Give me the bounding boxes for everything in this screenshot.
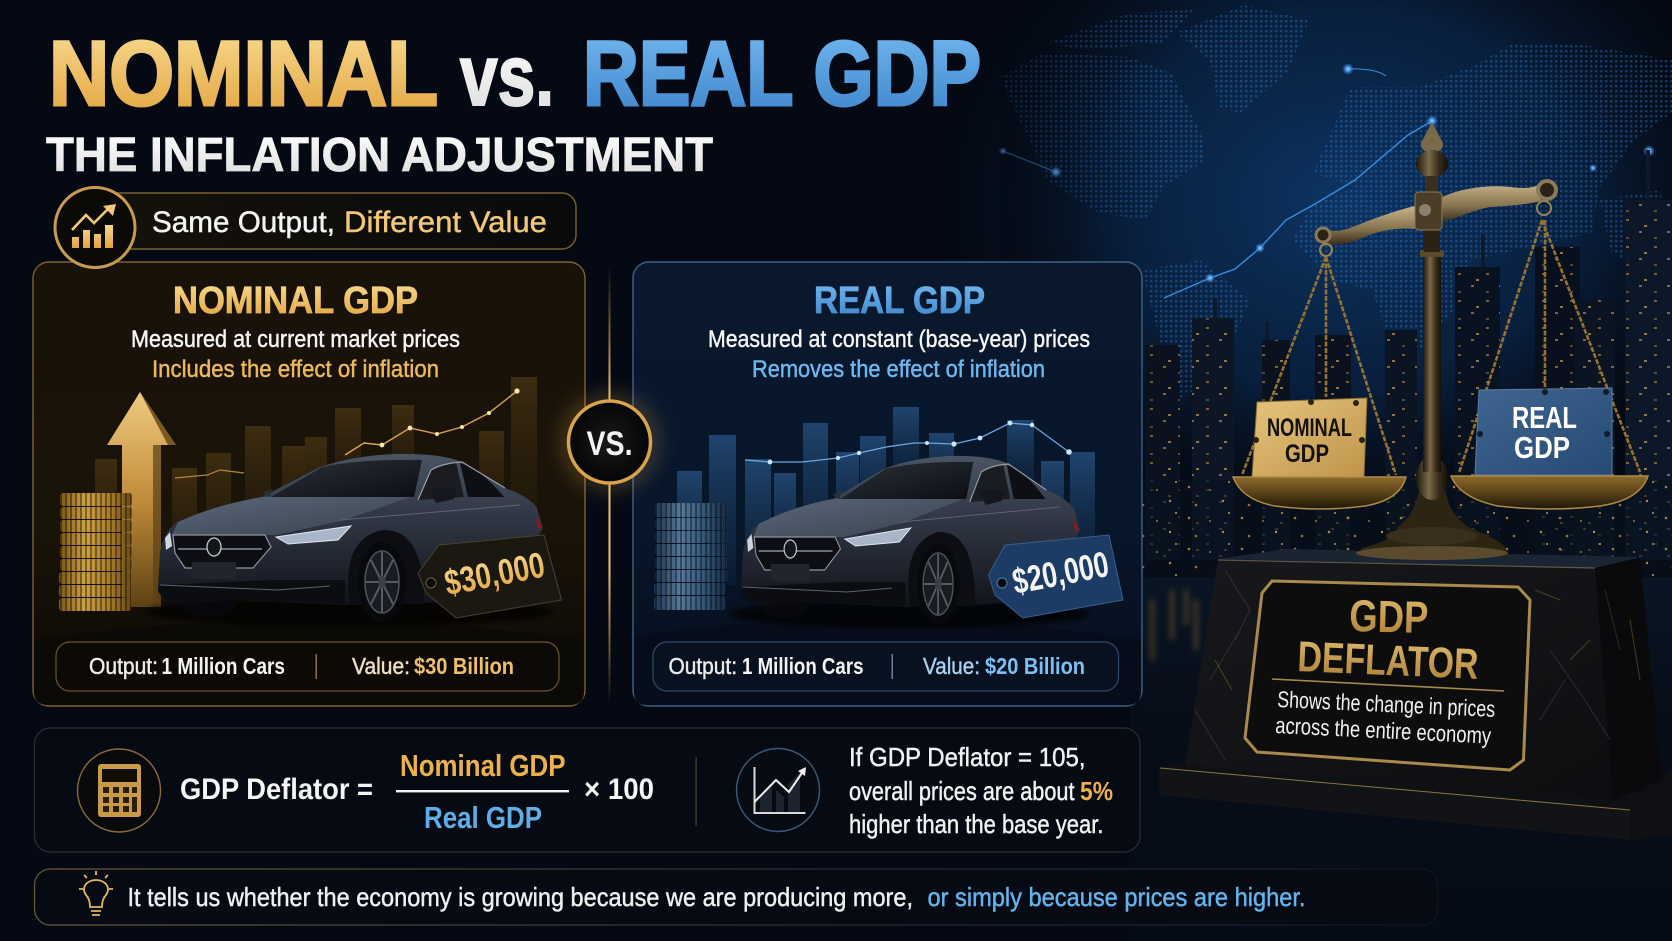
nominal stats pill: Output:: [89, 653, 158, 679]
real gdp plate: GDP: [1514, 430, 1570, 465]
nominal gdp plate: [1252, 398, 1367, 477]
nominal description: Measured at current market prices: [131, 326, 460, 353]
city skyline: [1142, 150, 1672, 580]
subtitle: THE INFLATION ADJUSTMENT: [46, 129, 713, 182]
blue coin stack: [654, 503, 727, 610]
nominal gdp plate: NOMINAL: [1267, 414, 1352, 442]
title: REAL GDP: [583, 23, 981, 125]
deflator explanation: If GDP Deflator = 105,: [849, 742, 1086, 772]
vs badge: [558, 265, 662, 705]
title: NOMINAL: [49, 23, 438, 125]
pedestal: [1159, 549, 1672, 840]
right pan: [1451, 476, 1648, 509]
same output banner: [55, 188, 576, 268]
nominal stats pill: [56, 642, 559, 691]
fraction: Nominal GDP: [400, 748, 566, 783]
takeaway bar: or simply because prices are higher.: [928, 882, 1306, 912]
nominal heading: NOMINAL GDP: [173, 280, 418, 322]
fraction: [396, 748, 569, 835]
gdp deflator plaque: across the entire economy: [1275, 712, 1492, 749]
formula panel: [34, 728, 1140, 852]
fraction: Real GDP: [424, 800, 542, 835]
nominal stats pill: $30 Billion: [414, 653, 514, 679]
real gdp panel: [633, 262, 1142, 706]
balance beam: [1316, 181, 1556, 256]
scale base and post: [1356, 122, 1508, 560]
nominal bar chart: [95, 377, 537, 589]
vs badge: VS.: [586, 425, 632, 463]
real stats pill: $20 Billion: [985, 653, 1085, 679]
gdp deflator plaque: DEFLATOR: [1297, 633, 1479, 689]
price tag $20,000: $20,000: [1009, 543, 1112, 602]
deflator explanation: overall prices are about: [849, 776, 1075, 806]
real stats pill: Output:: [668, 653, 737, 679]
real stats pill: 1 Million Cars: [742, 653, 864, 679]
real inflation note: Removes the effect of inflation: [752, 356, 1045, 383]
price tag $30,000: [418, 535, 562, 618]
floor: [634, 619, 1141, 705]
floor: [34, 620, 584, 705]
deflator explanation: [849, 742, 1113, 839]
title: [49, 23, 981, 125]
takeaway bar: [34, 869, 1438, 925]
icon: calculator: [78, 749, 160, 832]
nominal inflation note: Includes the effect of inflation: [152, 356, 439, 383]
gdp deflator plaque: [1245, 581, 1530, 770]
nominal gdp plate: GDP: [1285, 440, 1329, 468]
takeaway bar: It tells us whether the economy is growing because we are producing more,: [128, 882, 913, 912]
nominal trend line: [175, 388, 520, 478]
real stats pill: [653, 642, 1118, 691]
scale of justice: [1233, 122, 1648, 560]
deflator explanation: higher than the base year.: [849, 809, 1104, 839]
icon: light bulb: [79, 871, 113, 915]
world map backdrop: [940, 0, 1672, 520]
nominal gdp panel: [33, 262, 585, 706]
real car: [730, 456, 1090, 628]
real description: Measured at constant (base-year) prices: [708, 326, 1090, 353]
formula panel: × 100: [584, 773, 654, 806]
gdp deflator plaque: Shows the change in prices: [1277, 686, 1496, 722]
real stats pill: Value:: [923, 653, 980, 679]
gold coin stack: [59, 493, 132, 611]
price tag $30,000: $30,000: [441, 544, 548, 603]
title: vs.: [460, 28, 554, 124]
same output banner: Different Value: [344, 206, 547, 239]
icon: rising line chart: [736, 748, 820, 832]
same output banner: Same Output,: [152, 206, 335, 239]
real heading: REAL GDP: [814, 280, 985, 322]
reflective floor: [1000, 0, 1672, 941]
nominal stats pill: Value:: [352, 653, 410, 679]
gdp deflator plaque: GDP: [1349, 590, 1429, 643]
formula panel: GDP Deflator =: [180, 773, 373, 806]
price tag $20,000: [989, 535, 1123, 618]
left pan: [1233, 477, 1406, 509]
deflator explanation: 5%: [1080, 776, 1113, 806]
chains: [1242, 220, 1640, 475]
real gdp plate: [1475, 388, 1612, 475]
real trend line: [745, 421, 1072, 464]
real gdp plate: REAL: [1512, 400, 1577, 435]
real bar chart: [677, 407, 1095, 589]
icon: growth chart: [72, 204, 116, 248]
nominal car: [145, 454, 555, 626]
nominal stats pill: 1 Million Cars: [162, 653, 285, 679]
up arrow: [107, 392, 176, 607]
